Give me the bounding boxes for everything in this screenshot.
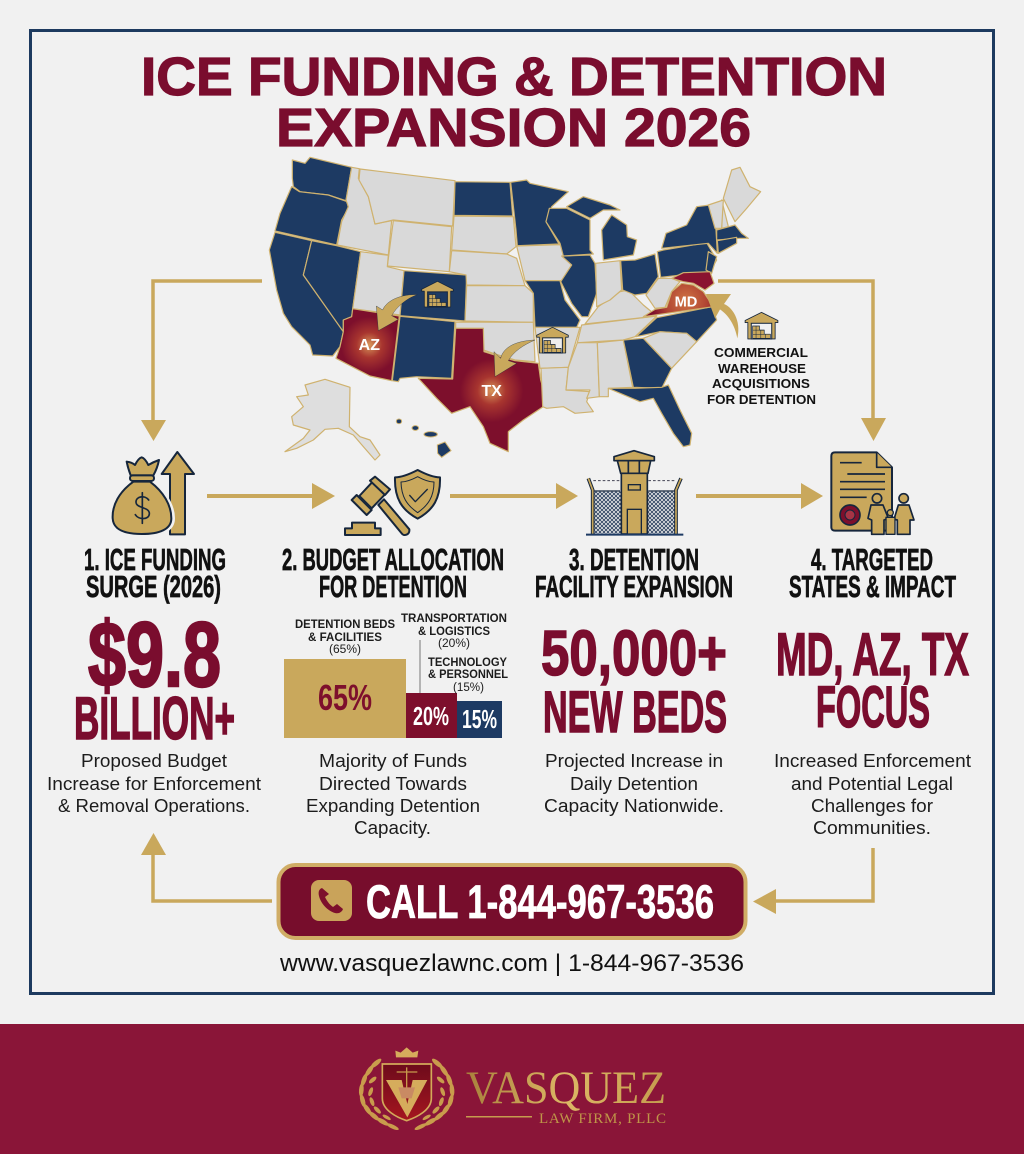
heading: step 3 <box>535 542 733 604</box>
stat: focus states <box>776 621 969 740</box>
arrow: warehouse to Texas <box>494 340 535 377</box>
stat: 9.8 billion: BILLION+ <box>74 685 235 752</box>
description: step 1: Increase for Enforcement <box>47 773 261 794</box>
bar chart: & PERSONNEL <box>428 669 508 681</box>
Texas: TX <box>481 383 502 400</box>
description: step 4: Communities. <box>813 817 931 838</box>
bar chart: DETENTION BEDS <box>295 619 395 631</box>
bar chart: 20% <box>413 701 449 731</box>
bar chart: TECHNOLOGY <box>428 657 507 669</box>
title: EXPANSION 2026 <box>276 98 751 158</box>
arrow: call button to funding <box>141 833 272 901</box>
US map <box>269 157 761 460</box>
arrow: map to targeted states <box>718 281 886 441</box>
Virginia and Maryland highlight: MD <box>675 295 697 311</box>
bar chart: 15% <box>462 704 497 734</box>
arrow: step 3 to 4 <box>696 483 823 509</box>
stat: focus states: FOCUS <box>816 675 930 740</box>
content frame <box>30 30 994 994</box>
description: step 4: and Potential Legal <box>791 773 953 794</box>
icon: gavel and shield <box>345 470 440 535</box>
heading: step 2: 2. BUDGET ALLOCATION <box>282 542 504 577</box>
bar chart <box>284 613 508 738</box>
map callout: FOR DETENTION <box>707 393 816 407</box>
eastern states <box>541 167 761 447</box>
warehouse icon: Arkansas <box>537 327 568 353</box>
arrow: step 2 to 3 <box>450 483 578 509</box>
description: step 1 <box>47 750 261 816</box>
western and central states <box>269 157 580 460</box>
bar chart: & FACILITIES <box>308 632 382 644</box>
stat: new beds: 50,000+ <box>541 617 727 689</box>
title <box>141 47 887 158</box>
icon: detention tower with fence <box>586 451 683 535</box>
map callout <box>707 346 816 407</box>
Alaska <box>285 379 380 460</box>
icon: document and family <box>831 452 914 534</box>
logo wordmark: LAW FIRM, PLLC <box>539 1111 666 1127</box>
stat: 9.8 billion: $9.8 <box>88 604 221 706</box>
bar chart: TRANSPORTATION <box>401 613 507 625</box>
call button <box>278 865 746 938</box>
panel: step 2 budget allocation <box>282 542 508 838</box>
bar chart: (65%) <box>329 644 361 656</box>
heading: step 1 <box>84 542 226 604</box>
logo <box>358 1047 666 1131</box>
map callout: ACQUISITIONS <box>712 377 810 391</box>
heading: step 1: SURGE (2026) <box>86 569 221 604</box>
Hawaii <box>396 419 451 457</box>
map callout: COMMERCIAL <box>714 346 808 360</box>
footer band <box>0 1024 1024 1154</box>
logo wordmark: VASQUEZ <box>466 1062 666 1114</box>
stat: new beds: NEW BEDS <box>543 680 727 745</box>
description: step 2: Expanding Detention <box>306 795 480 816</box>
Arizona: AZ <box>359 337 380 354</box>
description: step 2: Directed Towards <box>319 773 467 794</box>
arrow: warehouse to Maryland <box>706 294 738 338</box>
arrow: targeted states to call button <box>753 848 873 914</box>
description: step 2 <box>306 750 480 838</box>
description: step 4: Challenges for <box>811 795 933 816</box>
bar chart: (20%) <box>438 638 470 650</box>
panel: step 4 targeted states <box>774 542 971 838</box>
description: step 3: Capacity Nationwide. <box>544 795 724 816</box>
Arizona <box>336 309 399 381</box>
bar chart: 65% <box>318 677 372 718</box>
warehouse icon: Colorado <box>422 281 453 307</box>
stat: new beds <box>541 617 727 745</box>
description: step 3 <box>544 750 724 816</box>
Virginia and Maryland highlight <box>643 272 714 317</box>
logo emblem <box>358 1047 455 1131</box>
bar chart: (15%) <box>453 682 484 694</box>
heading: step 3: 3. DETENTION <box>569 542 699 577</box>
heading: step 2 <box>282 542 504 604</box>
description: step 2: Majority of Funds <box>319 750 467 771</box>
description: step 4: Increased Enforcement <box>774 750 971 771</box>
description: step 4 <box>774 750 971 838</box>
description: step 1: Proposed Budget <box>81 750 227 771</box>
heading: step 4: 4. TARGETED <box>811 542 933 577</box>
bar chart: & LOGISTICS <box>418 626 490 638</box>
heading: step 1: 1. ICE FUNDING <box>84 542 226 577</box>
heading: step 3: FACILITY EXPANSION <box>535 569 733 604</box>
call button: CALL 1-844-967-3536 <box>366 875 714 928</box>
Texas <box>418 328 545 452</box>
arrow: warehouse to Arizona <box>376 295 417 331</box>
description: step 3: Projected Increase in <box>545 750 723 771</box>
panel: step 1 funding surge <box>47 542 261 816</box>
heading: step 2: FOR DETENTION <box>319 569 467 604</box>
map callout: WAREHOUSE <box>718 362 806 376</box>
website and phone line: www.vasquezlawnc.com | 1-844-967-3536 <box>279 950 744 977</box>
heading: step 4 <box>789 542 956 604</box>
description: step 2: Capacity. <box>354 817 431 838</box>
icon: money bag with up arrow <box>112 452 194 535</box>
stat: 9.8 billion <box>74 604 235 752</box>
warehouse icon: east coast <box>745 312 778 339</box>
arrow: step 1 to 2 <box>207 483 335 509</box>
description: step 1: & Removal Operations. <box>58 795 250 816</box>
arrow: map to funding <box>141 281 262 441</box>
icon: phone <box>311 880 352 921</box>
title: ICE FUNDING & DETENTION <box>141 47 887 107</box>
panel: step 3 facility expansion <box>535 542 733 816</box>
description: step 3: Daily Detention <box>570 773 698 794</box>
